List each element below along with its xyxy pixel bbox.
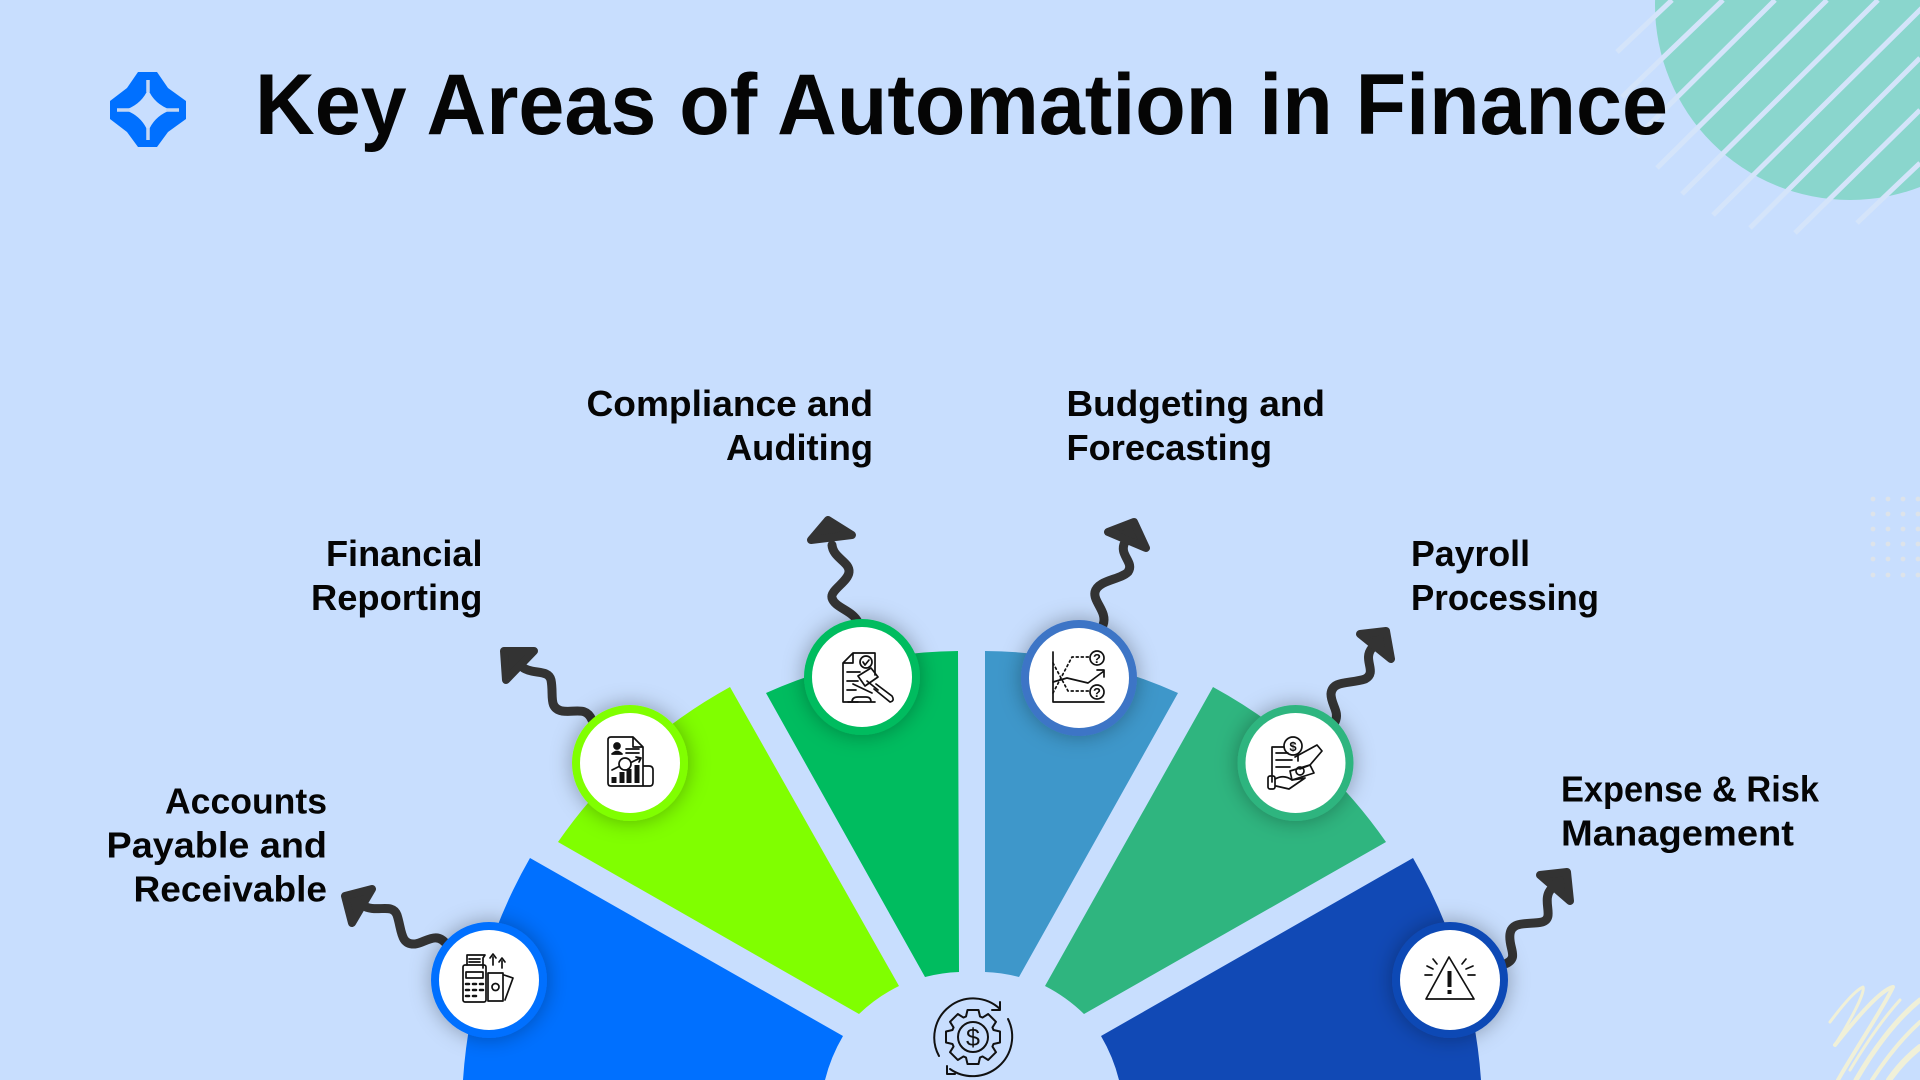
title: Key Areas of Automation in Finance	[255, 57, 1668, 153]
badge: budgeting and forecasting	[1021, 620, 1137, 736]
badge: expense and risk management	[1392, 922, 1508, 1038]
label: Expense & Risk Management	[1561, 768, 1820, 854]
icon: forecast chart	[1053, 651, 1104, 702]
label: Budgeting and Forecasting: Forecasting	[1066, 427, 1272, 468]
arrow: financial reporting	[504, 651, 592, 720]
icon: payment terminal and cash	[463, 954, 513, 1002]
label: Accounts Payable and Receivable	[106, 780, 327, 910]
label: Accounts Payable and Receivable: Payable and	[106, 824, 327, 866]
label: Financial Reporting	[311, 533, 482, 618]
arrow: budgeting and forecasting	[1095, 522, 1146, 625]
icon: central gear with dollar: $	[966, 1024, 980, 1052]
label: Financial Reporting: Reporting	[311, 577, 482, 618]
icon: hands exchanging money: $	[1289, 739, 1297, 754]
decoration: cream scribble	[1830, 987, 1920, 1080]
badge: accounts payable and receivable	[431, 922, 547, 1038]
badge: payroll processing	[1238, 705, 1354, 821]
icon: forecast chart: ?	[1093, 685, 1101, 700]
arrow: payroll processing	[1331, 631, 1391, 722]
label: Compliance and Auditing: Compliance and	[586, 383, 873, 424]
logo icon	[110, 72, 186, 147]
icon: warning triangle	[1425, 957, 1475, 999]
label: Budgeting and Forecasting: Budgeting and	[1066, 383, 1325, 424]
badge: compliance and auditing	[804, 619, 920, 735]
label: Expense & Risk Management: Management	[1561, 812, 1794, 854]
label: Accounts Payable and Receivable: Receivable	[134, 868, 327, 910]
wedge: payroll processing	[1045, 687, 1386, 1014]
icon: central gear with dollar	[934, 998, 1012, 1076]
label: Financial Reporting: Financial	[326, 533, 482, 574]
badge: financial reporting	[572, 705, 688, 821]
icon: document with gavel	[843, 653, 893, 702]
label: Compliance and Auditing	[586, 383, 873, 468]
arrow: accounts payable	[345, 889, 447, 945]
decoration: striped teal circle	[1617, 0, 1920, 233]
icon: forecast chart: ?	[1093, 651, 1101, 666]
label: Payroll Processing: Payroll	[1411, 533, 1530, 574]
arrow: compliance and auditing	[811, 520, 858, 622]
label: Payroll Processing	[1411, 533, 1599, 618]
label: Expense & Risk Management: Expense & Risk	[1561, 768, 1820, 810]
decoration: dot grid	[1871, 497, 1920, 577]
label: Accounts Payable and Receivable: Accounts	[165, 780, 327, 822]
label: Payroll Processing: Processing	[1411, 577, 1599, 618]
wedge: budgeting and forecasting	[985, 651, 1178, 977]
arrow: expense and risk management	[1505, 872, 1570, 964]
wedge: accounts payable and receivable	[463, 858, 843, 1080]
icon: report with chart	[608, 737, 653, 786]
label: Compliance and Auditing: Auditing	[726, 427, 873, 468]
wedge: compliance and auditing	[766, 651, 959, 977]
wedge: expense and risk management	[1101, 858, 1481, 1080]
wedge: financial reporting	[558, 687, 899, 1014]
label: Budgeting and Forecasting	[1066, 383, 1325, 468]
